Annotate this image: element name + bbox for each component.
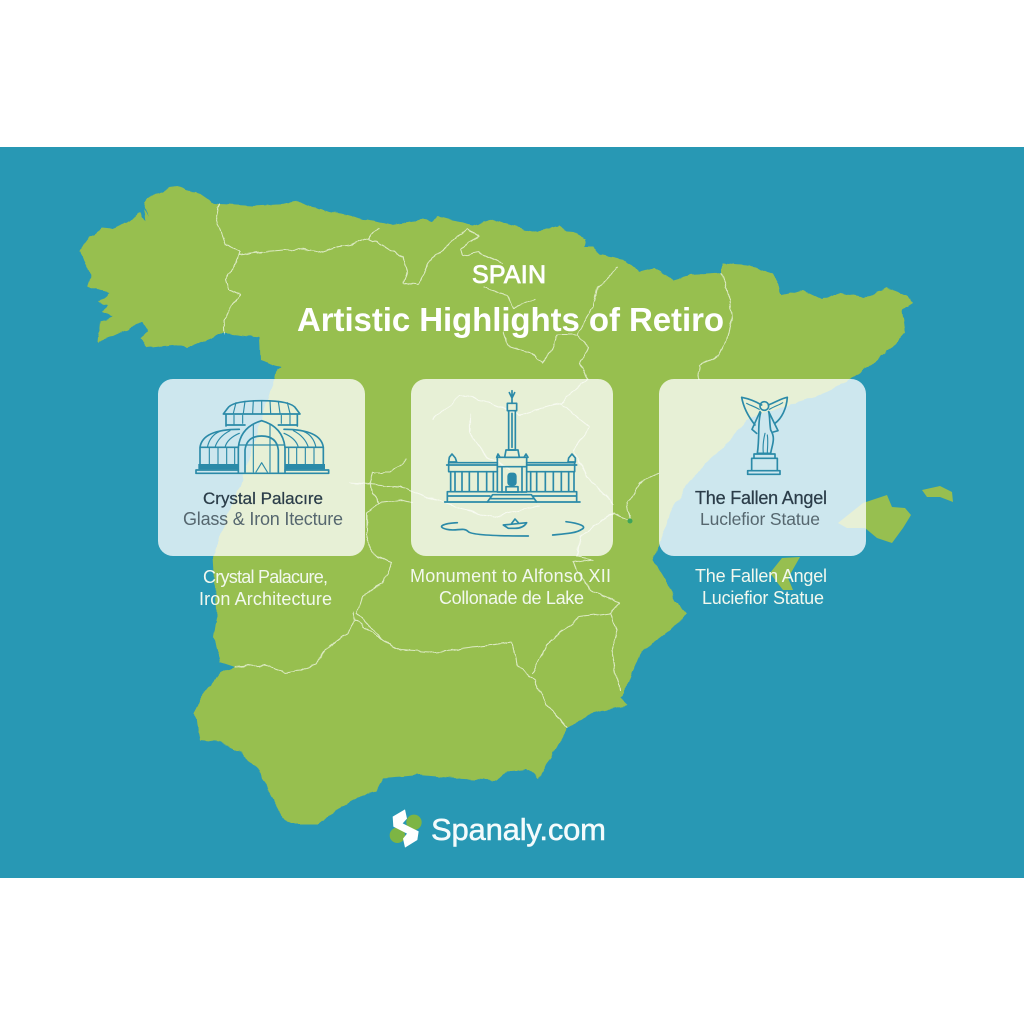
caption: Monument to Alfonso XII [410, 566, 611, 608]
title: Artistic Highlights of Retiro [297, 301, 724, 338]
card background [411, 379, 613, 556]
caption: Monument to Alfonso XII: Collonade de Lake [439, 588, 584, 608]
card background [659, 379, 866, 556]
map of Spain [80, 186, 953, 824]
island: Menorca [922, 486, 953, 502]
island: Ibiza [770, 557, 800, 590]
caption: Monument to Alfonso XII: Monument to Alfonso XII [410, 566, 611, 586]
logo mark [390, 809, 422, 848]
icon: fallen angel statue [742, 397, 787, 474]
logo wordmark: Spanaly.com [431, 812, 606, 847]
card title: Crystal Palacıre [203, 489, 323, 508]
caption: The Fallen Angel: The Fallen Angel [695, 566, 827, 586]
panel: Crystal Palace [158, 379, 365, 556]
sea background band [0, 147, 1024, 878]
panel: The Fallen Angel [659, 379, 866, 556]
caption: The Fallen Angel [695, 566, 827, 608]
mainland [80, 186, 913, 824]
card subtitle: Luclefior Statue [700, 509, 820, 529]
caption: The Fallen Angel: Luciefior Statue [702, 588, 824, 608]
icon: crystal palace [196, 401, 329, 473]
green marker dot [628, 518, 632, 524]
caption: Crystal Palace: Crystal Palacure, [203, 567, 328, 587]
heading: SPAIN: SPAIN [472, 261, 546, 289]
card background [158, 379, 365, 556]
icon: monument and lake [442, 391, 584, 536]
panel: Monument to Alfonso XII [411, 379, 613, 556]
card title: The Fallen Angel [695, 488, 827, 508]
logo: Spanaly.com [390, 809, 606, 848]
regional borders [217, 204, 732, 728]
card subtitle: Glass & Iron Itecture [183, 509, 343, 529]
island: Mallorca [838, 495, 911, 543]
caption: Crystal Palace: Iron Architecture [199, 589, 332, 609]
caption: Crystal Palace [199, 567, 332, 609]
